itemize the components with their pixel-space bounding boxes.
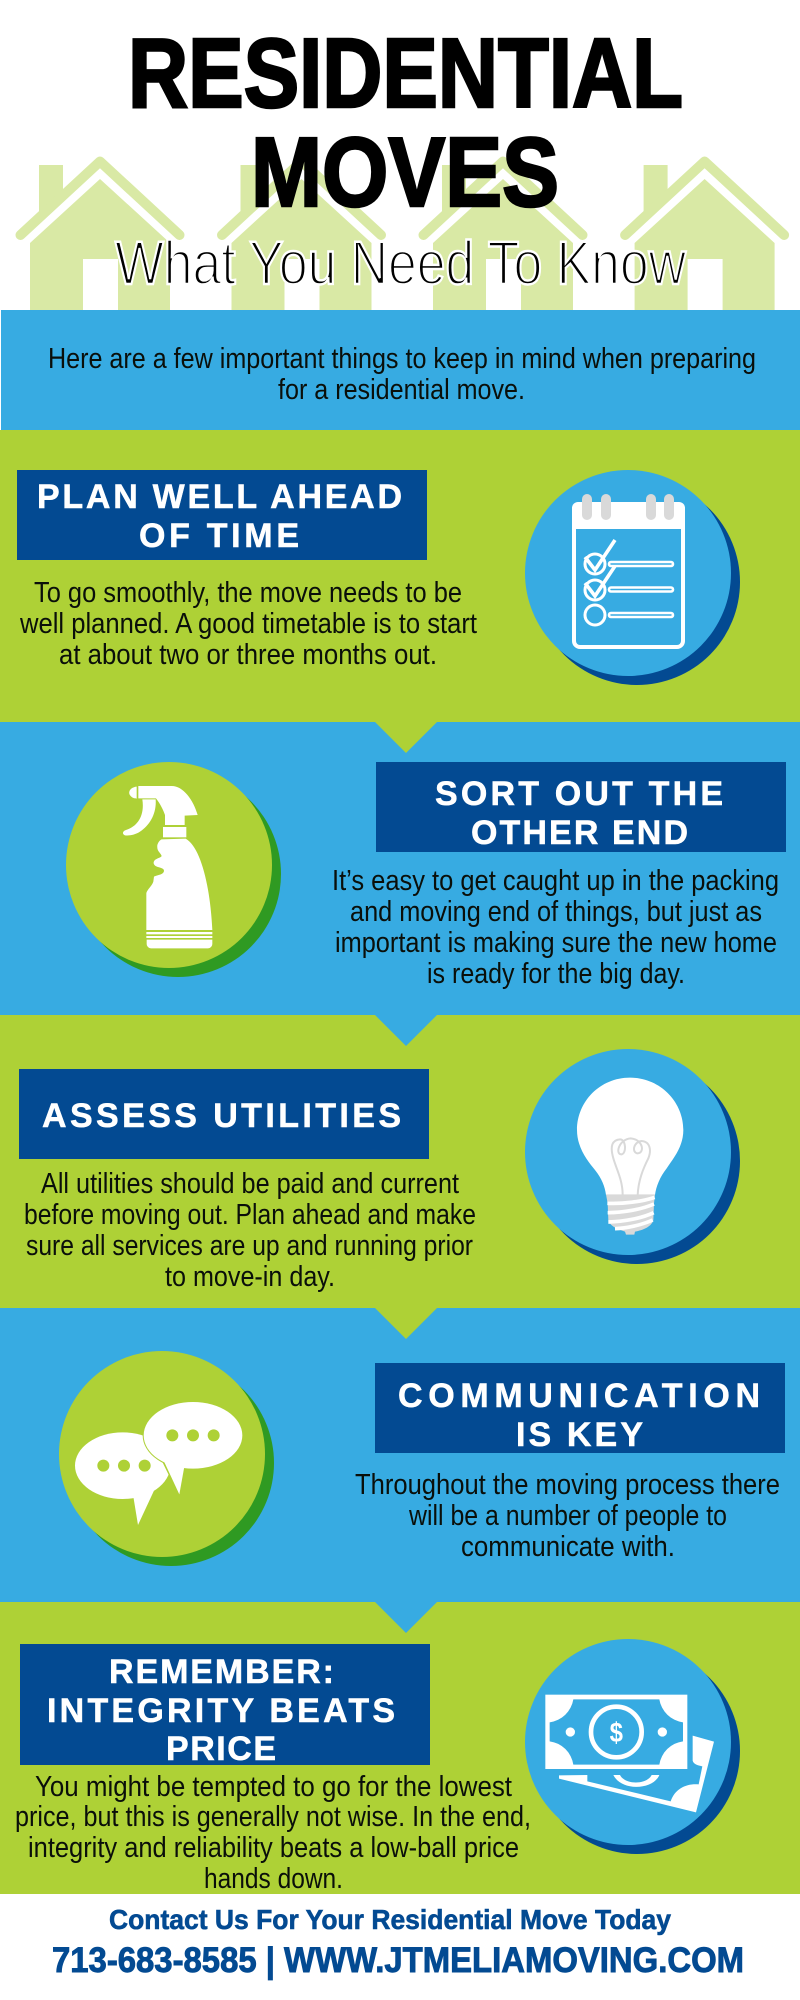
panel: assess utilities [0,1015,800,1308]
arrow: green notch [375,722,437,753]
panel: introduction: for a residential move. [278,374,525,406]
text block: integrity: integrity and reliability beats a low-ball price [28,1832,519,1864]
panel: communication is key [0,1308,800,1602]
title: RESIDENTIAL [128,18,683,128]
icon: dollar bills: $ [610,1717,623,1748]
text block: other end: is ready for the big day. [427,958,685,990]
heading: remember integrity beats price: PRICE [166,1730,276,1768]
background houses [20,162,784,310]
text block: utilities: sure all services are up and running prior [26,1230,473,1262]
text block: plan: well planned. A good timetable is to start [19,608,477,640]
heading: remember integrity beats price: REMEMBER: [109,1653,334,1691]
text block: utilities: All utilities should be paid and current [41,1168,459,1200]
heading: sort out the other end [376,762,786,852]
subtitle: What You Need To Know [115,229,687,297]
heading: sort out the other end: SORT OUT THE [435,775,723,813]
text block: plan [19,577,477,671]
heading: communication is key: IS KEY [516,1416,643,1454]
icon: spray bottle [66,762,281,977]
text block: communication: will be a number of people to [408,1500,727,1532]
icon: speech bubbles [59,1351,274,1566]
title [128,18,683,227]
text block: integrity: You might be tempted to go for the lowest [35,1771,512,1803]
heading: communication is key: COMMUNICATION [398,1377,760,1415]
icon: checklist notepad [525,470,740,685]
text block: utilities: before moving out. Plan ahead and make [24,1199,476,1231]
text block: integrity: hands down. [204,1863,343,1895]
heading: remember integrity beats price [20,1644,430,1768]
title: MOVES [251,117,559,227]
panel: remember integrity beats price [0,1602,800,1895]
icon: dollar bills [525,1639,740,1854]
footer: contact details: 713-683-8585 | WWW.JTMELIAMOVING.COM [52,1941,744,1980]
text block: other end [332,865,779,990]
text block: plan: To go smoothly, the move needs to be [34,577,462,609]
panel: introduction [1,310,800,430]
heading: sort out the other end: OTHER END [471,814,688,852]
text block: communication: communicate with. [461,1531,675,1563]
text block: utilities [24,1168,476,1293]
footer: contact details: Contact Us For Your Residential Move Today [109,1904,671,1935]
heading: plan well ahead of time [17,470,427,560]
panel: sort out the other end [0,722,800,1015]
heading: plan well ahead of time: PLAN WELL AHEAD [37,478,402,516]
panel: plan well ahead of time [0,430,800,722]
heading: assess utilities: ASSESS UTILITIES [42,1097,401,1135]
icon: light bulb [525,1049,740,1264]
text block: integrity: price, but this is generally not wise. In the end, [15,1801,531,1833]
heading: assess utilities [19,1069,429,1159]
heading: remember integrity beats price: INTEGRITY BEATS [47,1692,395,1730]
arrow: blue notch [375,1602,437,1633]
text block: integrity [15,1771,531,1895]
arrow: green notch [375,1308,437,1339]
text block: utilities: to move-in day. [165,1261,335,1293]
heading: communication is key [375,1363,785,1454]
heading: plan well ahead of time: OF TIME [139,517,299,555]
text block: plan: at about two or three months out. [59,639,437,671]
text block: communication [355,1469,780,1563]
footer: contact details [52,1904,744,1980]
arrow: blue notch [375,1015,437,1046]
